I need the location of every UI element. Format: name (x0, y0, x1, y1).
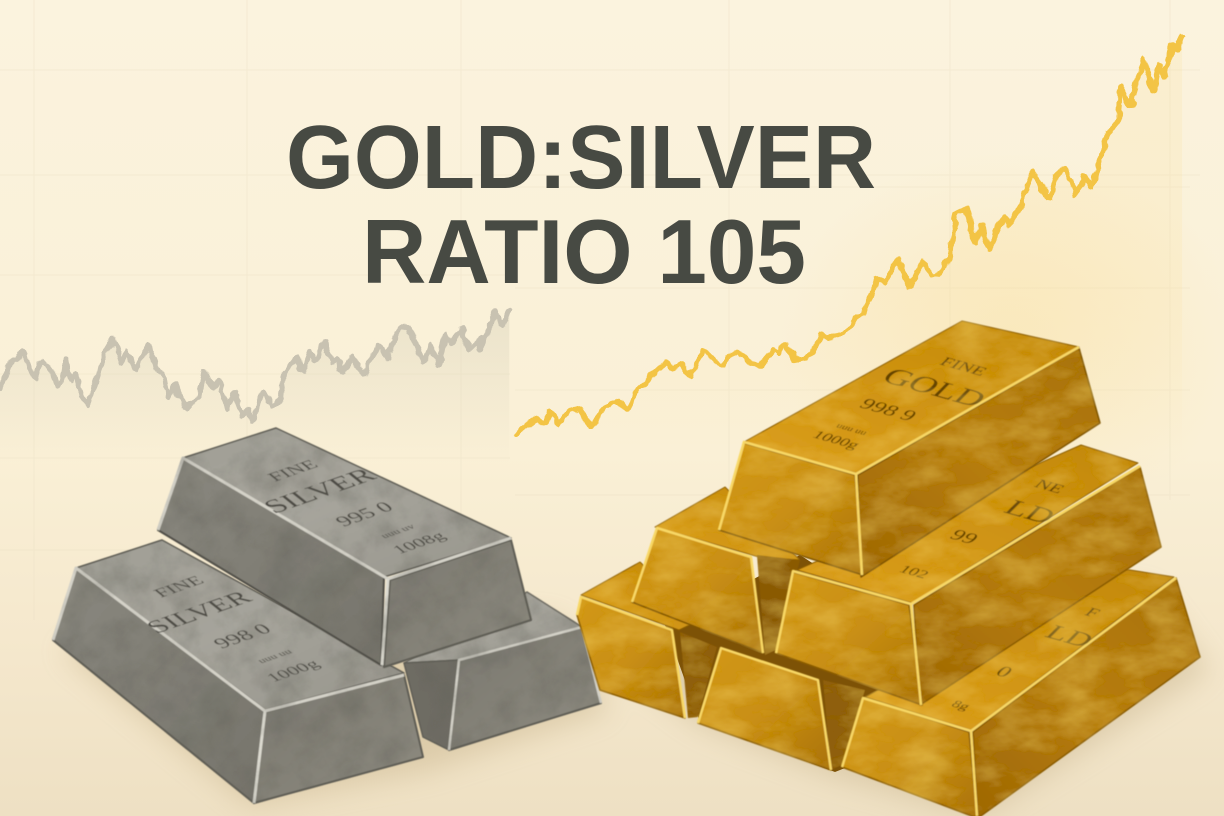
glow behind gold chart (780, 150, 1224, 530)
silver bar text: 1000g (262, 657, 323, 684)
silver bar text: uuu uv (378, 522, 418, 540)
gold bar text: 99 (945, 526, 983, 547)
silver bar: front left (53, 540, 423, 803)
gold chart line (516, 35, 1182, 433)
gold bar text: F (1081, 605, 1104, 620)
gold bars stack (577, 321, 1200, 816)
title line 2: RATIO 105 (362, 202, 806, 303)
gold bar text (809, 354, 994, 452)
silver bar: back right (404, 592, 601, 750)
silver bar text: SILVER (140, 587, 259, 637)
silver bar text: FINE (150, 573, 209, 600)
gold bar: middle left (632, 487, 800, 655)
silver bar text (140, 573, 323, 684)
chart grid (0, 0, 1200, 620)
silver bar text: uuu uu (255, 647, 295, 665)
gold bar text: GOLD (876, 363, 994, 412)
silver chart area fill (0, 310, 509, 513)
gold bar text: 1000g (809, 429, 863, 452)
silver bar text: SILVER (257, 464, 383, 518)
title line 1: GOLD:SILVER (286, 108, 876, 208)
silver price chart (0, 310, 509, 513)
gold bar: bottom right (842, 567, 1200, 816)
gold bar: bottom left (577, 562, 717, 718)
silver bars stack (53, 428, 601, 803)
gold bar text (948, 605, 1104, 713)
gold bar text (896, 477, 1069, 581)
silver bar text: FINE (264, 457, 323, 484)
silver bar: top (158, 428, 531, 667)
silver bar text (257, 457, 449, 556)
silver chart line (0, 310, 509, 422)
gold bar text: 998 9 (855, 395, 922, 424)
gold bar text: LD (998, 495, 1062, 528)
gold bar: top (719, 321, 1100, 577)
gold chart area fill (516, 35, 1182, 453)
gold bar text: 102 (896, 563, 932, 581)
shadowed gaps between gold bars (665, 555, 930, 772)
gold bar: bottom middle (698, 648, 865, 770)
silver bar text: 1008g (388, 529, 449, 556)
floor shadows (60, 590, 1210, 816)
silver bar text: 998 0 (208, 621, 276, 652)
gold bar text: 0 (991, 663, 1017, 681)
gold bar text: NE (1031, 477, 1069, 496)
gold bar text: 8g (948, 698, 973, 713)
gold bar text: FINE (936, 354, 991, 378)
gold bar: middle right (776, 445, 1161, 705)
gold bar text: uuu uu (834, 422, 870, 437)
gold price chart (516, 35, 1182, 453)
silver bar text: 995 0 (330, 499, 398, 530)
gold bar text: LD (1039, 621, 1099, 652)
title (286, 108, 876, 303)
